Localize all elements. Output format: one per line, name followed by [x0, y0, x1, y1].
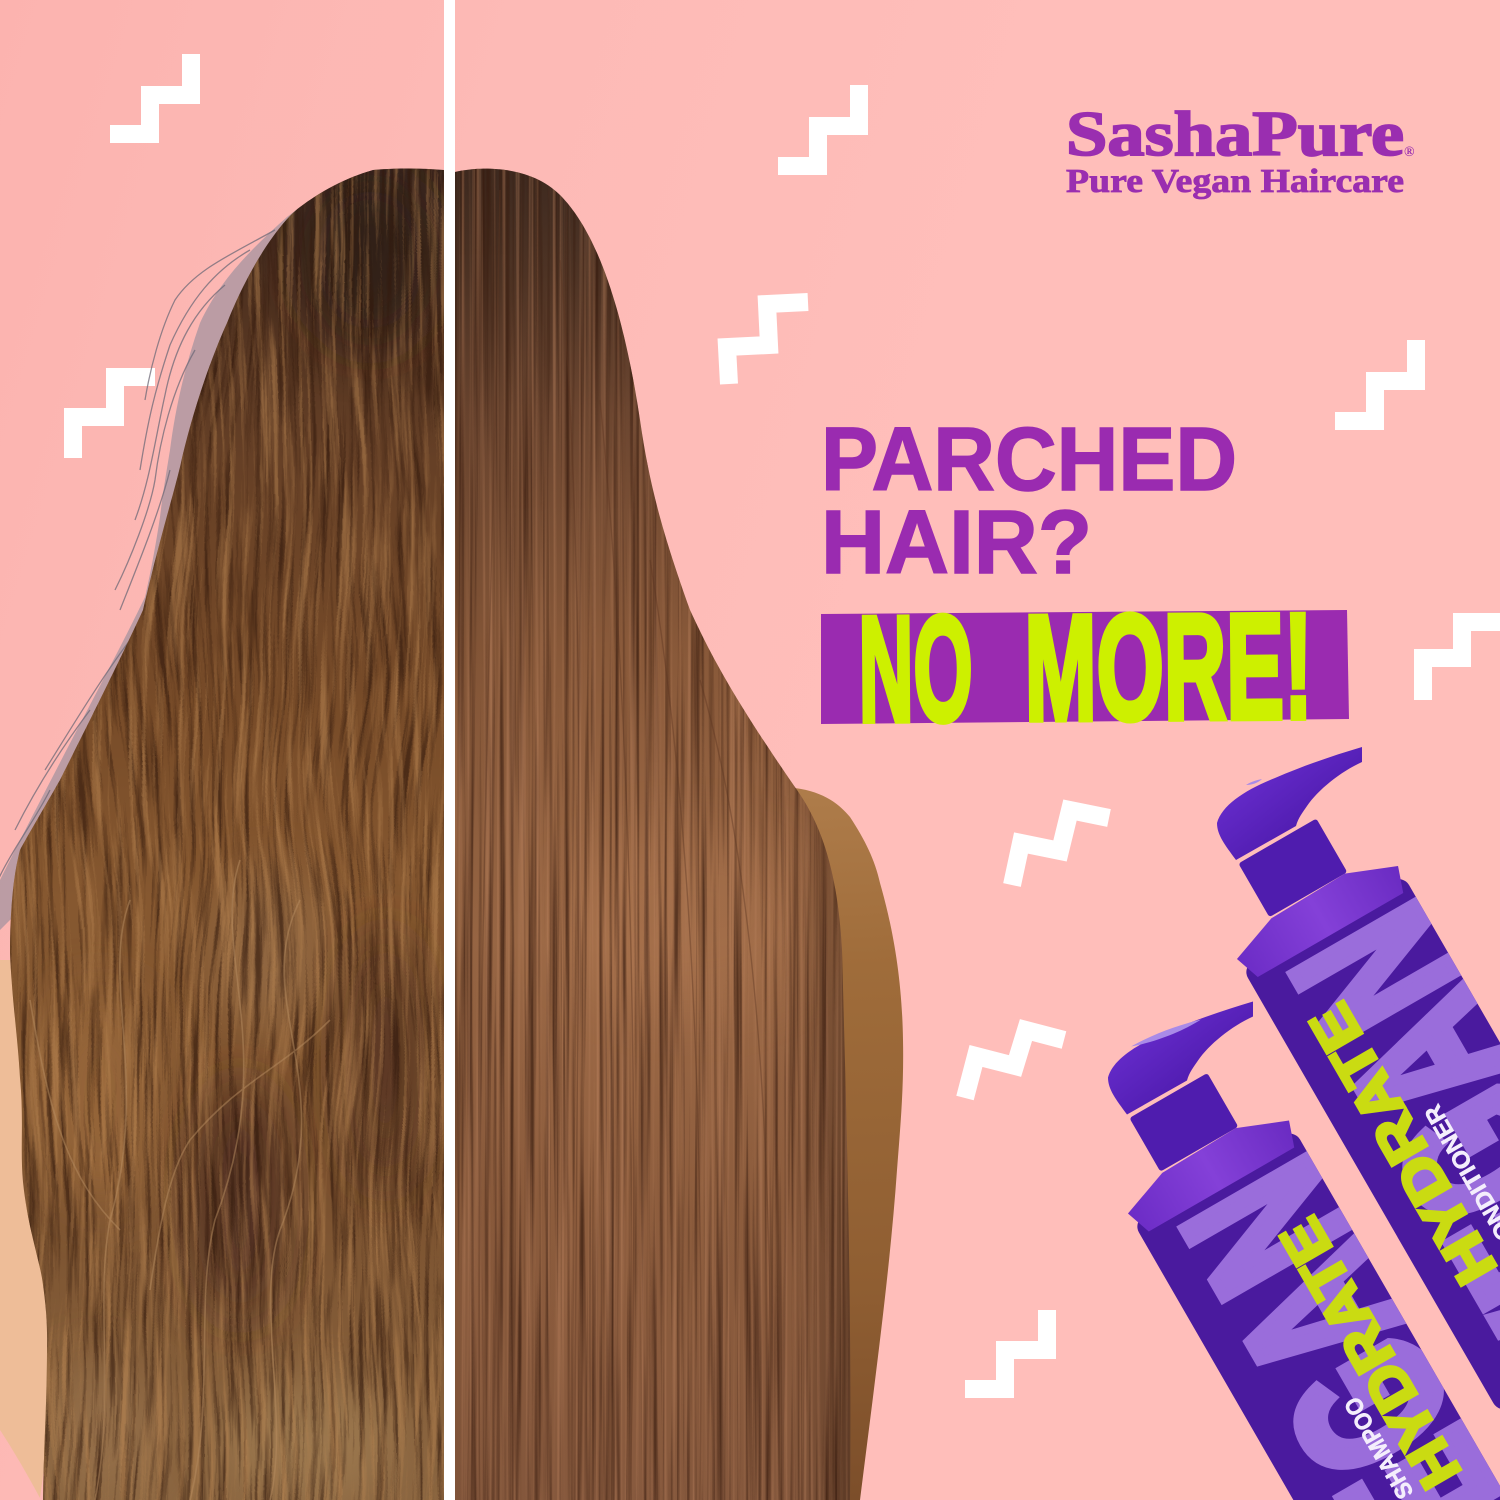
headline: PARCHED: [821, 410, 1237, 510]
shampoo bottle: SHAMPOO: [1339, 1392, 1419, 1500]
logo: [1066, 98, 1415, 200]
headline: [821, 410, 1237, 593]
hair: smooth right half: [455, 160, 855, 1500]
logo: Pure Vegan Haircare: [1066, 163, 1404, 200]
hair: dry frizzy left half: [10, 168, 444, 1500]
headline: HAIR?: [821, 493, 1092, 593]
divider line: [444, 0, 455, 1500]
no more banner: [821, 582, 1349, 753]
model: left back skin: [0, 960, 60, 1498]
logo: SashaPure: [1066, 98, 1404, 169]
shampoo bottle: HYDRATE: [1267, 1207, 1474, 1499]
hair: frizzy grey fringe: [0, 207, 300, 930]
logo: ®: [1404, 145, 1415, 160]
no more banner: NO: [858, 584, 973, 753]
model: back and shoulder: [780, 788, 903, 1500]
